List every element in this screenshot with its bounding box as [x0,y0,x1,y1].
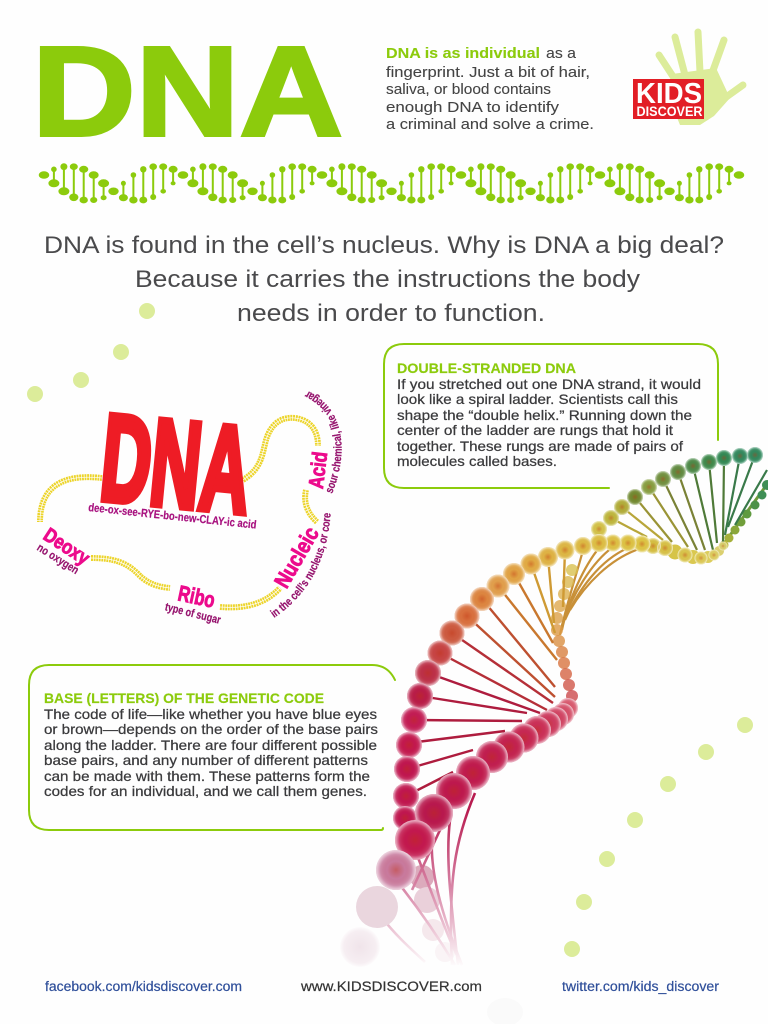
body text [397,376,701,469]
icon: Kids Discover hand logo: DISCOVER [636,103,702,119]
main statement [44,232,724,327]
heading: BASE (LETTERS) OF THE GENETIC CODE [44,690,324,706]
Ribo: Ribo [176,581,217,613]
Deoxy: Deoxy [39,524,94,570]
Nucleic: Nucleic [269,522,324,592]
pronunciation: dee-ox-see-RYE-bo-new-CLAY-ic acid [88,502,257,532]
no oxygen: no oxygen [34,542,81,577]
body text [44,706,378,799]
body text: or brown—depends on the order of the base pairs [44,721,378,737]
fading rungs and back balls [380,793,475,965]
body text: shape the “double helix.” Running down the [397,407,692,423]
illustration: double helix [340,447,768,1024]
icon: Kids Discover hand logo [633,32,743,125]
word diagram: DNA name origins [34,390,342,627]
rungs upper [611,455,767,550]
upper green balls [591,447,763,537]
body text: center of the ladder are rungs that hold it [397,422,673,438]
red DNA wordmark: DNA [95,390,257,540]
footer links: facebook.com/kidsdiscover.com [45,979,242,994]
intro text block: a criminal and solve a crime. [386,116,594,133]
body text: codes for an individual, and we call them genes. [44,783,367,799]
middle yellow to red balls [393,534,650,830]
Acid: Acid [305,450,332,490]
main statement: needs in order to function. [237,300,545,327]
sour chemical, like vinegar: sour chemical, like vinegar [304,391,342,494]
back strand orange and rungs [551,547,642,702]
icon: Kids Discover hand logo: KIDS [636,78,702,110]
body text: can be made with them. These patterns form the [44,768,370,784]
panel: base letters of the genetic code [29,665,395,830]
green helix divider [39,163,744,204]
body text: molecules called bases. [397,453,557,469]
panel: double-stranded DNA [384,344,718,488]
lower red turn balls [340,698,578,967]
body text: The code of life—like whether you have blue eyes [44,706,377,722]
back strand green [720,480,768,550]
decorative dots right [564,717,753,957]
intro text block [386,45,594,133]
body text: along the ladder. There are four different possible [44,737,377,753]
body text: together. These rungs are made of pairs of [397,438,683,454]
main statement: DNA is found in the cell’s nucleus. Why is DNA a big deal? [44,232,724,259]
body text: If you stretched out one DNA strand, it would [397,376,701,392]
footer links: www.KIDSDISCOVER.com [300,978,482,994]
intro text block: DNA is as individual [386,45,540,62]
main statement: Because it carries the instructions the body [135,266,641,293]
heading: DOUBLE-STRANDED DNA [397,360,576,376]
rungs middle [406,550,565,796]
intro text block: enough DNA to identify [386,99,560,116]
intro text block: saliva, or blood contains [386,81,551,98]
type of sugar: type of sugar [164,601,222,627]
footer links [45,978,720,994]
decorative dots left [27,303,155,402]
in the cell's nucleus, or core: in the cell’s nucleus, or core [270,513,331,618]
title: DNA: DNA [32,20,343,164]
body text: base pairs, and any number of different patterns [44,752,368,768]
intro text block: fingerprint. Just a bit of hair, [386,64,590,81]
footer links: twitter.com/kids_discover [562,979,720,994]
body text: look like a spiral ladder. Scientists call this [397,391,678,407]
intro text block: as a [546,45,577,62]
yellow turn balls [645,538,728,564]
